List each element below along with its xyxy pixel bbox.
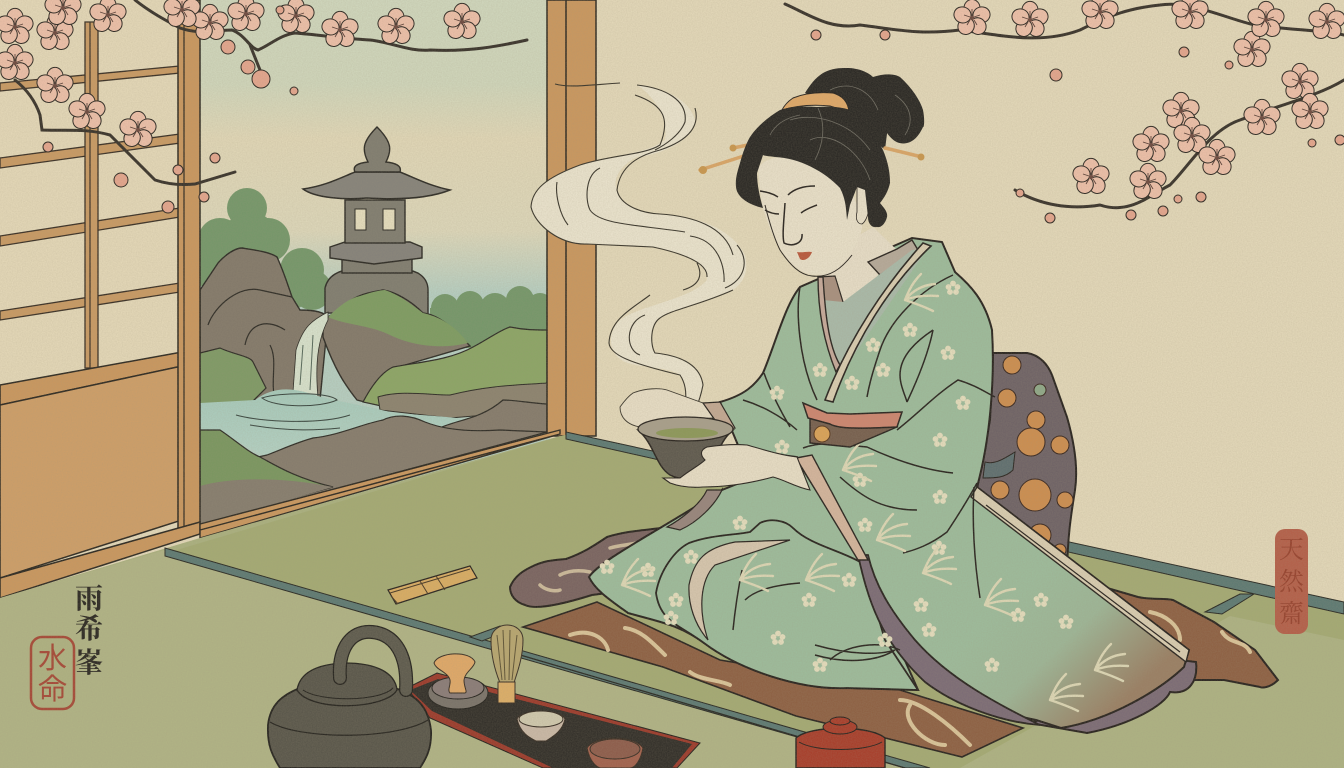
red seal right [1275,529,1308,634]
collar band [825,243,931,402]
red seal right: 天 [1279,530,1304,566]
left hem motifs [540,542,640,591]
neck [818,227,912,320]
right hill [363,327,547,410]
body and sleeve [720,238,1189,728]
waterfall [293,312,328,398]
purple sleeve band [858,555,1040,725]
shoji stile [178,0,200,532]
tatami floor [0,432,1344,768]
right rock bank [440,400,547,440]
right hem [1066,576,1278,687]
tea bowl [638,417,733,479]
upper panel edge rail [0,352,182,405]
knee stripes [689,540,790,640]
inner knee [656,520,918,690]
whisk [491,625,523,703]
red seal left: 命 [38,666,67,708]
steam [531,83,746,425]
obi front [803,403,902,447]
signature calligraphy: 希 [75,607,103,647]
lower purple under-hem [1030,660,1196,733]
tea utensils [388,566,885,768]
red seal left [31,635,74,709]
window post and sill [200,0,596,538]
left rocks [200,248,328,405]
lacquer caddy [796,728,885,768]
iron kettle [268,632,431,768]
upper hand [620,389,715,427]
left mid bank [200,348,266,405]
cushion motifs [570,612,1250,745]
left sleeve trail [667,490,722,530]
stone lantern [303,127,450,315]
signature calligraphy: 雨 [75,577,103,617]
woman in kimono [510,68,1278,757]
facial features [760,186,817,245]
pink cream sleeve cuff stripes [796,455,868,560]
lattice mullion [85,22,98,368]
green hump and rock [323,290,470,402]
upper sleeve cuff [703,402,735,430]
shoji screen [0,0,200,598]
cream long stripes [971,487,1189,662]
back obi [975,353,1076,570]
fold lines [733,275,995,660]
signature calligraphy: 峯 [75,641,103,681]
foreground bank [200,416,547,524]
lattice rails [0,66,180,320]
kimono frond pattern [622,274,1128,711]
folded package [388,566,477,604]
left green bank [200,430,333,512]
left hem [510,490,723,607]
face [758,156,862,275]
scoop stand [428,654,488,709]
red seal right: 齋 [1279,594,1304,630]
tatami borders [165,548,930,768]
shoji rail [0,522,200,598]
red seal left: 水 [38,635,67,677]
knee panel [589,460,918,690]
red seal right: 然 [1279,562,1305,598]
under-collar pattern [818,276,843,325]
pond [200,389,470,456]
tea tray [407,673,700,768]
ear [856,181,870,224]
small bowl [517,711,565,741]
panel: garden view [186,0,553,530]
collar grey inner [868,240,918,275]
hair [699,68,924,227]
cushion [523,602,1023,757]
brown cup [587,738,643,768]
far bushes [186,188,553,348]
lower wood panel [0,366,182,578]
blossoms top right [785,0,1344,223]
kimono dot pattern [600,281,1073,672]
collar grey-green panel [823,248,928,375]
collar left stripes [818,277,840,372]
lower hand [663,445,810,490]
blossoms top left [0,0,527,213]
